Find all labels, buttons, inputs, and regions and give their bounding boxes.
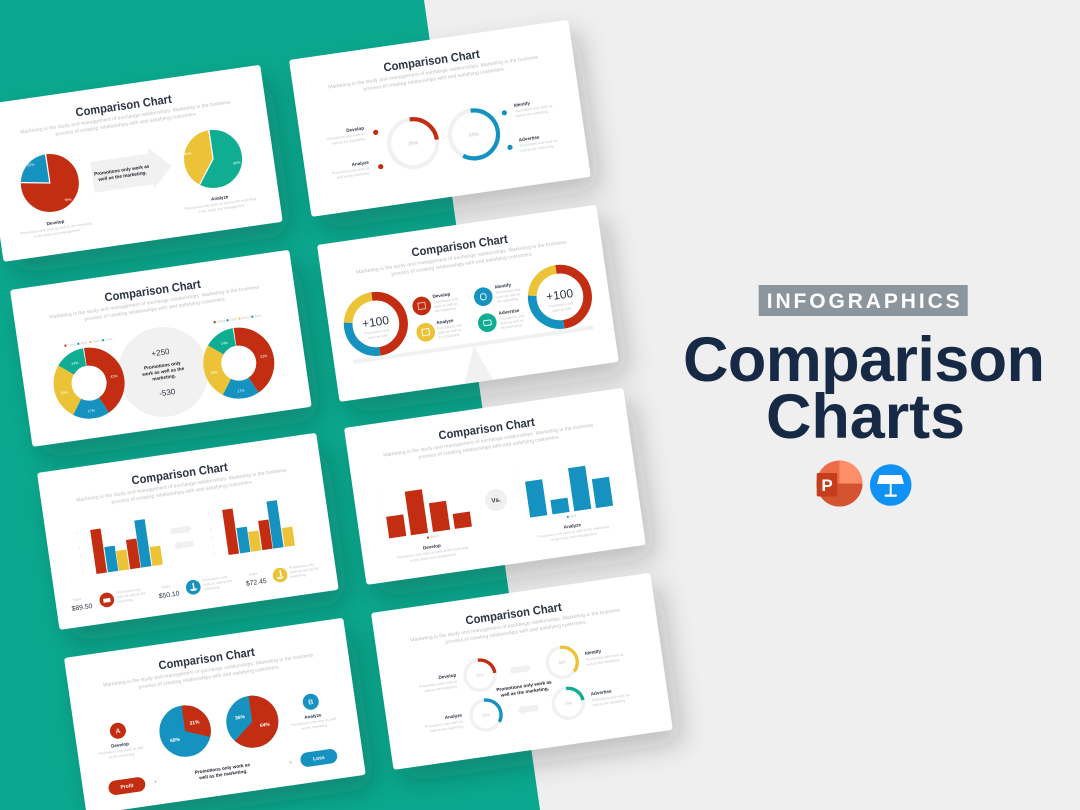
arrow with message: well as the marketing. [97, 170, 147, 182]
price: 50.10: marketing. [204, 585, 220, 591]
price: 89.50: $89.50 [71, 603, 93, 613]
price: 50.10 [157, 574, 234, 600]
right legend [213, 313, 262, 324]
right donut chart: 17% [237, 388, 246, 394]
forward arrow [510, 663, 532, 676]
left donut ring: Promotions only [364, 328, 390, 336]
left bar chart [76, 517, 163, 576]
card background [371, 573, 673, 770]
label: develop: in the study and management [34, 228, 80, 239]
left bar chart: 8 [76, 531, 79, 535]
item: identify: well as the marketing. [515, 109, 549, 118]
main heading [683, 325, 1045, 452]
left pie chart [17, 151, 72, 208]
price: 50.10: Sales [161, 584, 171, 589]
item: identify: Identify [513, 101, 531, 108]
right bar chart: 2 [212, 543, 215, 548]
label: analyze: Analyze [211, 194, 229, 202]
slide subtitle: process of creating relationships with and satisfying customers. [445, 619, 587, 646]
price: 89.50: Sales [72, 597, 82, 602]
item: identify: well as the marketing. [586, 658, 620, 667]
slide subtitle: Marketing is the study and management of exchange relationships. Marketing is the business [20, 99, 231, 136]
badge A with develop text: Promotions only work as well [98, 746, 144, 756]
ring: develop: 25% [476, 673, 485, 678]
left donut chart: 26% [60, 390, 69, 395]
label: analyze: in the study and management [198, 204, 244, 214]
left legend: June [105, 337, 113, 342]
item: develop: Develop [438, 672, 457, 680]
item: develop: Promotions only [433, 297, 459, 304]
slide subtitle: process of creating relationships with and satisfying customers. [84, 296, 226, 323]
item: identify: Identify [585, 649, 602, 656]
centre circle: -530 [159, 387, 176, 398]
slide title: Comparison Chart [158, 645, 256, 673]
price: 72.45: $72.45 [246, 578, 267, 588]
ring: identify: 50% [558, 660, 567, 665]
centre message [496, 679, 553, 698]
teal diagonal band [0, 0, 540, 810]
right bar chart [207, 498, 295, 557]
slide subtitle: process of creating relationships with and satisfying customers. [138, 664, 280, 691]
left legend [64, 337, 113, 348]
right donut ring [529, 266, 591, 328]
icon: powerpoint: P [821, 476, 833, 495]
slide subtitle: process of creating relationships with and satisfying customers. [418, 434, 560, 461]
left donut chart: 43% [110, 374, 119, 379]
item: develop: Promotions only work as [327, 132, 365, 141]
item: develop: well as the marketing. [424, 684, 458, 693]
item: analyze: Analyze [444, 713, 463, 720]
item: develop [411, 290, 460, 317]
badge A with develop text: A [115, 728, 121, 736]
slide subtitle: Marketing is the study and management of exchange relationships. Marketing is the business [383, 422, 594, 459]
item: identify: Promotions only work as [514, 104, 553, 113]
left bar chart: 4 [79, 554, 82, 559]
price: 72.45: work as well as the [289, 566, 319, 574]
plus sign right: + [289, 760, 294, 766]
price: 89.50: work as well as the [116, 591, 146, 599]
item: identify: Promotions only work as [586, 652, 624, 662]
item: analyze: well as the marketing. [337, 171, 371, 180]
item: develop: Develop [346, 126, 365, 133]
ring: advertise: 25% [564, 701, 573, 706]
slide subtitle: Marketing is the study and management of exchange relationships. Marketing is the business [356, 239, 567, 276]
left legend: April [80, 341, 88, 345]
label: develop: Promotions only work as well as the marketing [20, 221, 92, 236]
item: analyze [424, 713, 464, 734]
left legend: March [92, 338, 102, 344]
item: develop [326, 124, 379, 146]
right pie chart: 64% [260, 722, 271, 729]
left bar chart: 2 [81, 562, 83, 567]
label: develop: Promotions only work as well as the marketing [397, 546, 469, 560]
item: identify: the marketing [497, 297, 518, 304]
versus badge [484, 488, 508, 513]
card background [64, 618, 366, 810]
item: advertise: well as the marketing. [520, 144, 554, 153]
price: 50.10: work as well as the [203, 579, 233, 587]
slide subtitle: Marketing is the study and management of exchange relationships. Marketing is the business [328, 54, 539, 91]
label: analyze: in the study and management [551, 532, 597, 542]
left pie chart: 69% [170, 737, 181, 744]
label: develop: Develop [423, 543, 441, 550]
right bar chart: 8 [208, 512, 210, 516]
label: develop [20, 215, 93, 241]
card background [289, 20, 591, 217]
left pie chart: 78% [64, 197, 72, 203]
right legend: April [229, 317, 237, 322]
slide title: Comparison Chart [75, 92, 173, 120]
item: identify [585, 645, 625, 667]
left bar chart: 6 [78, 547, 81, 551]
item: advertise: work as well as [500, 318, 524, 326]
ring: analyze: 40% [482, 713, 491, 718]
badge B with analyze text: B [308, 699, 314, 707]
left donut ring: +100 [361, 313, 390, 331]
exchange arrows [170, 524, 194, 551]
label: analyze: Promotions only work as well as the marketing [537, 525, 609, 539]
slide subtitle: process of creating relationships with and satisfying customers. [363, 66, 505, 93]
right bar chart: 4 [211, 536, 214, 540]
card background [0, 65, 283, 262]
item: analyze: Promotions only work as [332, 166, 370, 176]
badge A with develop text: Develop [111, 741, 129, 749]
card background [10, 250, 312, 447]
slide: bar charts with prices [37, 433, 339, 630]
centre circle: work as well as the [141, 366, 185, 377]
card background [37, 433, 339, 630]
red bar chart: March [429, 534, 439, 539]
arrow with message [89, 145, 175, 198]
item: analyze [415, 317, 464, 343]
price: 72.45: Promotions only [289, 562, 314, 570]
scale beam and pivot [353, 325, 599, 399]
left pie chart: 22% [27, 162, 35, 168]
badge A with develop text: as the marketing [108, 752, 135, 760]
back arrow [517, 703, 539, 716]
plus sign left: + [154, 779, 158, 786]
left legend: Sales [67, 342, 77, 347]
left donut ring: work as well [368, 333, 388, 340]
versus badge: Vs. [491, 496, 501, 505]
slide: pie comparison with arrow [0, 65, 283, 262]
item: develop: Develop [432, 291, 451, 299]
centre message: Promotions only work as [496, 679, 552, 692]
loss pill: Loss [313, 755, 325, 762]
left donut chart: 14% [71, 361, 79, 366]
item: advertise: Promotions only work as [519, 139, 558, 148]
infographics tag [759, 285, 968, 316]
centre circle: marketing. [152, 373, 176, 382]
right pie chart [234, 706, 272, 737]
label: develop: Develop [46, 219, 65, 226]
right bar chart: 7 [209, 520, 211, 524]
label: analyze [184, 190, 257, 216]
centre circle [112, 321, 214, 423]
slide subtitle: Marketing is the study and management of exchange relationships. Marketing is the business [103, 652, 314, 689]
red bar chart [377, 473, 475, 546]
left donut chart [56, 353, 123, 417]
right donut ring: Promotions only [548, 301, 574, 309]
badge B with analyze text: as the marketing [301, 723, 328, 731]
right donut chart [206, 333, 273, 397]
slide title: Comparison Chart [438, 415, 536, 443]
left ring 25 percent: 25% [408, 140, 419, 148]
item: advertise: the marketing [500, 323, 522, 330]
item: analyze: Analyze [436, 318, 454, 325]
badge B with analyze text: Promotions only work as well [291, 717, 337, 727]
label: analyze [536, 518, 610, 544]
slide: balance scale with rings [317, 205, 619, 402]
slide: progress rings [289, 20, 591, 217]
price: 89.50: Promotions only [116, 587, 141, 595]
loss pill [300, 748, 338, 768]
item: develop: the marketing [434, 306, 456, 313]
slide: pies with A and B [64, 618, 366, 810]
blue bar chart: April [569, 514, 577, 519]
badge A with develop text [94, 720, 144, 761]
profit pill: Profit [120, 783, 134, 791]
item: analyze: work as well as [438, 328, 462, 335]
main heading: Charts [766, 382, 965, 452]
item: advertise: Promotions only [499, 314, 525, 321]
right donut ring: work as well [552, 306, 572, 313]
item: identify: work as well as [496, 292, 520, 299]
label: analyze: Promotions only work as well as the marketing [185, 197, 256, 211]
price: 72.45 [244, 562, 320, 588]
slide: versus bar charts [344, 388, 646, 585]
right donut chart: 14% [221, 341, 229, 346]
right bar chart: 0 [213, 551, 216, 556]
badge B with analyze text: Analyze [304, 712, 322, 720]
item: identify: Identify [494, 282, 512, 290]
slide: two donuts with centre circle [10, 250, 312, 447]
item: identify: Promotions only [495, 287, 521, 295]
profit pill [108, 776, 146, 796]
item: develop: well as the marketing. [332, 137, 366, 146]
item: advertise: Advertise [498, 308, 520, 316]
right pie chart: 40% [184, 151, 193, 156]
right bar chart: 6 [210, 528, 212, 532]
label: develop: in the study and management [410, 552, 457, 563]
left bar chart: 7 [77, 539, 80, 543]
right ring 60 percent: 60% [469, 131, 480, 139]
price: 50.10: Promotions only [202, 575, 228, 582]
right pie chart [182, 126, 244, 186]
ring: advertise [551, 686, 585, 720]
slide title: Comparison Chart [383, 47, 481, 75]
ring: analyze [469, 698, 503, 732]
left pie chart: 31% [189, 719, 200, 727]
right donut chart: 26% [210, 370, 219, 375]
price: 89.50 [70, 587, 147, 613]
price: 50.10: $50.10 [158, 590, 180, 600]
card background [344, 388, 646, 585]
slide subtitle: Marketing is the study and management of exchange relationships. Marketing is the business [410, 607, 621, 644]
card background [317, 205, 619, 402]
right ring 60 percent [447, 107, 501, 162]
item: develop: Promotions only work as [419, 679, 458, 689]
right donut ring: +100 [545, 286, 574, 304]
item: develop: work as well as [434, 302, 458, 309]
item: analyze: Promotions only work as [425, 719, 463, 729]
centre message: well as the marketing. [499, 686, 549, 698]
slide subtitle: process of creating relationships with and satisfying customers. [111, 479, 253, 506]
centre message: well as the marketing. [198, 769, 248, 781]
main heading: Comparison [683, 325, 1045, 395]
badge B with analyze text [287, 691, 337, 732]
blue bar chart [517, 453, 617, 525]
left pie chart [167, 716, 203, 746]
slide title: Comparison Chart [411, 232, 509, 260]
left bar chart: 0 [82, 570, 84, 575]
centre message: Promotions only work as [194, 762, 251, 775]
infographics tag: INFOGRAPHICS [767, 290, 960, 313]
ring: identify [545, 645, 579, 679]
right legend: March [241, 315, 251, 320]
left donut ring [344, 293, 407, 355]
slide subtitle: process of creating relationships with and satisfying customers. [55, 111, 197, 138]
item: advertise [590, 686, 631, 707]
arrow with message: Promotions only work as [94, 164, 150, 177]
item: analyze: the marketing [438, 333, 460, 340]
right legend: Sales [216, 319, 226, 324]
centre circle: Promotions only [144, 360, 181, 371]
slide: four thin rings [371, 573, 673, 770]
item: advertise: Advertise [590, 688, 612, 696]
price: 89.50: marketing. [117, 598, 134, 604]
right pie chart: 36% [235, 714, 246, 722]
price: 72.45: Sales [248, 572, 258, 577]
slide title: Comparison Chart [104, 277, 202, 305]
left donut chart: 17% [88, 409, 96, 414]
right pie chart: 60% [233, 160, 242, 166]
item: analyze: Promotions only [437, 323, 463, 331]
item: advertise: Promotions only work as [591, 693, 630, 702]
label: analyze: Analyze [563, 522, 582, 530]
item: advertise [477, 307, 526, 333]
slide subtitle: Marketing is the study and management of exchange relationships. Marketing is the business [49, 284, 260, 321]
left ring 25 percent [386, 116, 440, 170]
right legend: June [254, 313, 262, 318]
item: advertise: Advertise [518, 135, 540, 143]
item: analyze: Analyze [351, 160, 370, 167]
centre circle: +250 [151, 347, 171, 358]
slide subtitle: Marketing is the study and management of exchange relationships. Marketing is the business [76, 467, 287, 504]
ring: develop [463, 658, 497, 692]
item: identify [473, 281, 522, 307]
centre message [194, 762, 252, 781]
right donut chart: 43% [260, 354, 268, 359]
item: analyze: well as the marketing. [430, 724, 464, 733]
item: identify [501, 97, 554, 120]
slide title: Comparison Chart [465, 600, 563, 628]
icon: powerpoint [816, 460, 862, 507]
price: 72.45: marketing. [290, 573, 307, 579]
slide subtitle: process of creating relationships with and satisfying customers. [391, 251, 533, 278]
item: develop [418, 672, 458, 694]
icon: keynote [870, 464, 912, 506]
slide title: Comparison Chart [131, 460, 229, 488]
item: advertise [506, 132, 559, 155]
item: analyze [331, 158, 384, 180]
label: develop [396, 539, 469, 565]
item: advertise: well as the marketing. [592, 699, 626, 707]
